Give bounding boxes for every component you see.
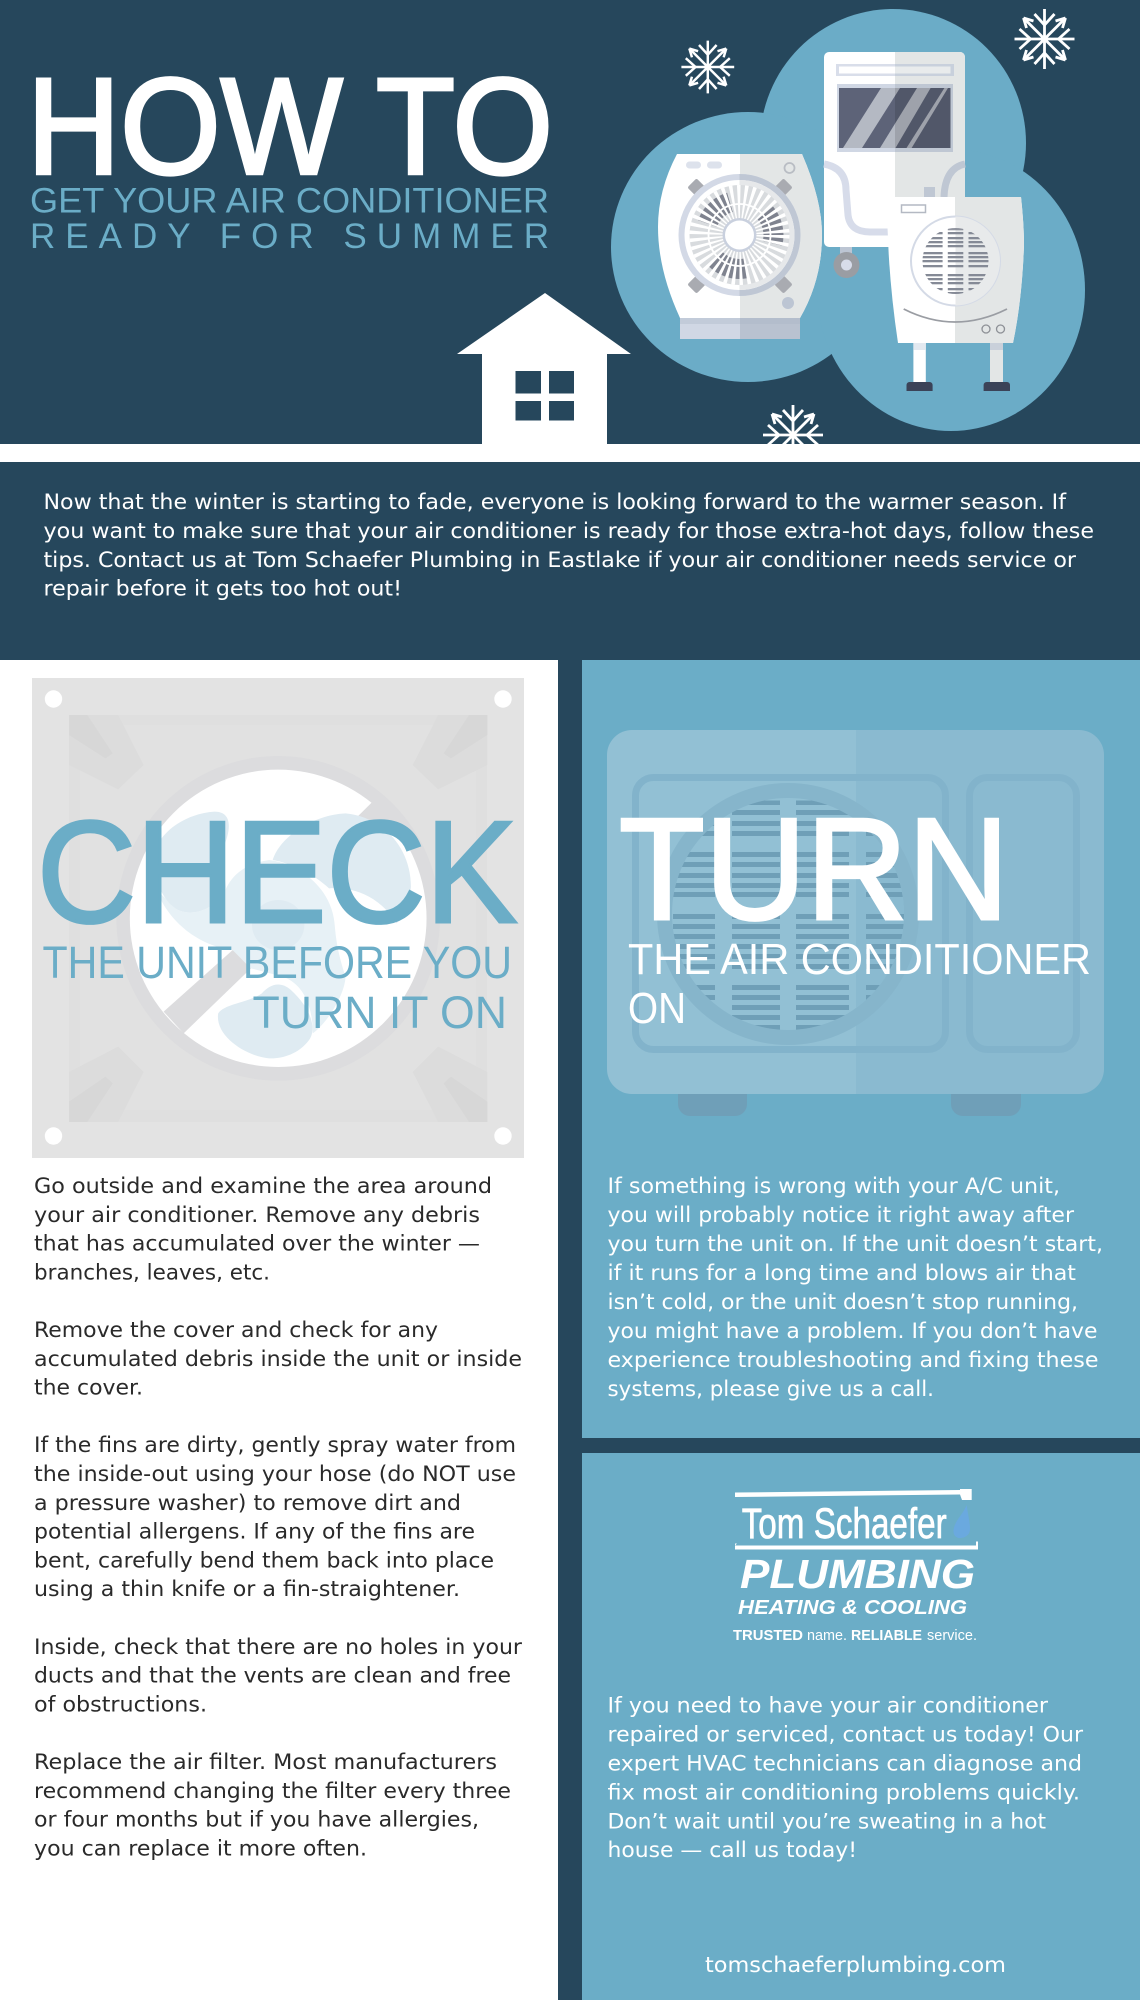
check body text: the inside-out using your hose (do NOT use <box>34 1462 516 1487</box>
icon: standing cooler <box>887 197 1024 391</box>
heading: turn: ON <box>628 984 686 1033</box>
turn body text: isn’t cold, or the unit doesn’t stop running, <box>608 1290 1078 1315</box>
turn body text: systems, please give us a call. <box>608 1377 934 1402</box>
heading: turn: TURN <box>619 788 1009 950</box>
check body text: branches, leaves, etc. <box>34 1260 270 1285</box>
title: how to: GET YOUR AIR CONDITIONER <box>30 182 549 220</box>
check body text: bent, carefully bend them back into place <box>34 1548 494 1573</box>
check body text: If the fins are dirty, gently spray water from <box>34 1433 516 1458</box>
turn body text: you turn the unit on. If the unit doesn’t start, <box>608 1232 1103 1257</box>
icon: water drop <box>953 1505 970 1538</box>
illustration: fan unit <box>32 678 524 1158</box>
icon: upright cooler <box>824 52 965 278</box>
check body text: the cover. <box>34 1376 143 1401</box>
contact body text <box>608 1694 1083 1863</box>
logo: tom schaefer plumbing: Tom Schaefer <box>742 1500 947 1548</box>
contact body text: fix most air conditioning problems quickly. <box>608 1780 1080 1806</box>
panel: turn background <box>582 660 1140 1438</box>
contact body text: Don’t wait until you’re sweating in a hot <box>608 1809 1046 1834</box>
cloud shape <box>611 9 1085 431</box>
horizontal navy divider <box>582 1438 1140 1453</box>
logo: tom schaefer plumbing: name. <box>807 1627 847 1644</box>
check body text: that has accumulated over the winter — <box>34 1232 480 1257</box>
heading: turn: THE AIR CONDITIONER <box>628 935 1091 984</box>
check body text: Go outside and examine the area around <box>34 1174 492 1199</box>
check body text: potential allergens. If any of the fins are <box>34 1520 475 1545</box>
check body text: or four months but if you have allergies, <box>34 1808 479 1833</box>
intro text: Now that the winter is starting to fade, everyone is looking forward to the warmer season. If <box>44 490 1066 515</box>
panel: intro <box>0 462 1140 660</box>
contact body text: house — call us today! <box>608 1838 857 1863</box>
icon: box fan <box>658 154 822 339</box>
logo frame <box>735 1489 978 1550</box>
turn body text: if it runs for a long time and blows air that <box>608 1261 1076 1286</box>
contact body text: If you need to have your air conditioner <box>608 1694 1048 1719</box>
heading: check: TURN IT ON <box>252 987 507 1038</box>
contact body text: expert HVAC technicians can diagnose and <box>608 1752 1082 1777</box>
heading: check <box>37 791 517 1038</box>
logo: tom schaefer plumbing: service. <box>927 1627 977 1644</box>
turn body text: experience troubleshooting and fixing these <box>608 1348 1098 1373</box>
check body text: Replace the air filter. Most manufacturers <box>34 1750 497 1775</box>
logo: tom schaefer plumbing: TRUSTED <box>733 1627 803 1644</box>
check body text: of obstructions. <box>34 1692 207 1717</box>
check body text: a pressure washer) to remove dirt and <box>34 1491 461 1516</box>
intro text: you want to make sure that your air conditioner is ready for those extra-hot days, follow these <box>44 519 1094 544</box>
turn body text: you will probably notice it right away after <box>608 1203 1074 1228</box>
intro text <box>44 490 1094 602</box>
turn body text: If something is wrong with your A/C unit, <box>608 1174 1060 1199</box>
intro text: repair before it gets too hot out! <box>44 576 402 602</box>
navy gutter <box>558 660 582 2000</box>
check body text: recommend changing the filter every three <box>34 1779 511 1804</box>
panel: check background <box>0 660 558 2000</box>
title: how to: HOW TO <box>27 50 553 204</box>
logo: tom schaefer plumbing: HEATING & COOLING <box>738 1597 967 1619</box>
logo: tom schaefer plumbing: RELIABLE <box>851 1627 922 1644</box>
check body text: ducts and that the vents are clean and free <box>34 1664 511 1689</box>
turn body text: you might have a problem. If you don’t have <box>608 1319 1098 1344</box>
check body text: accumulated debris inside the unit or inside <box>34 1347 522 1372</box>
check body text: Inside, check that there are no holes in your <box>34 1635 522 1660</box>
check body text: Remove the cover and check for any <box>34 1318 438 1343</box>
header background <box>0 0 1140 444</box>
turn body text <box>608 1174 1103 1402</box>
check body text: using a thin knife or a fin-straightener. <box>34 1577 460 1602</box>
illustration: outdoor ac unit <box>607 730 1104 1116</box>
panel: contact background <box>582 1453 1140 2000</box>
heading: check: CHECK <box>37 791 517 953</box>
icon: snowflake bottom <box>763 405 823 465</box>
logo: tom schaefer plumbing: PLUMBING <box>740 1551 975 1597</box>
white divider band <box>0 444 1140 462</box>
website url: tomschaeferplumbing.com <box>705 1953 1006 1978</box>
check body text <box>34 1174 522 1861</box>
icon: cloud with air conditioners <box>611 9 1085 431</box>
contact body text: repaired or serviced, contact us today! Our <box>608 1723 1083 1748</box>
intro text: tips. Contact us at Tom Schaefer Plumbing in Eastlake if your air conditioner needs service or <box>44 548 1076 573</box>
heading: check: THE UNIT BEFORE YOU <box>42 937 512 988</box>
check body text: you can replace it more often. <box>34 1836 367 1861</box>
heading: turn <box>619 788 1091 1033</box>
logo: tom schaefer plumbing <box>733 1489 978 1644</box>
check body text: your air conditioner. Remove any debris <box>34 1203 480 1228</box>
icon: house <box>457 293 631 444</box>
title: how to: READY FOR SUMMER <box>30 217 549 256</box>
icon: snowflake left <box>681 41 734 93</box>
icon: snowflake right <box>1014 9 1074 69</box>
